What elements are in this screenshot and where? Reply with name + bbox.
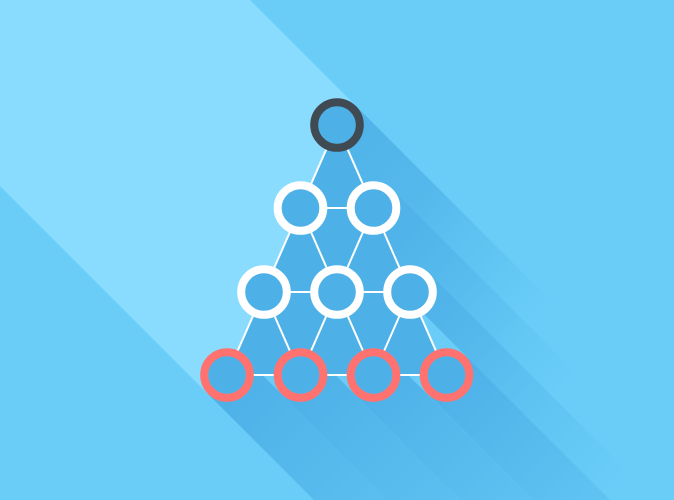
bottom row nodes <box>204 352 469 398</box>
connector lines <box>227 125 446 375</box>
triangle fill <box>227 125 446 375</box>
long shadow <box>208 106 674 500</box>
third row nodes <box>241 269 433 315</box>
light diagonal band <box>0 0 356 394</box>
network pyramid <box>204 102 469 398</box>
top node <box>314 102 360 148</box>
second row nodes <box>278 185 396 231</box>
